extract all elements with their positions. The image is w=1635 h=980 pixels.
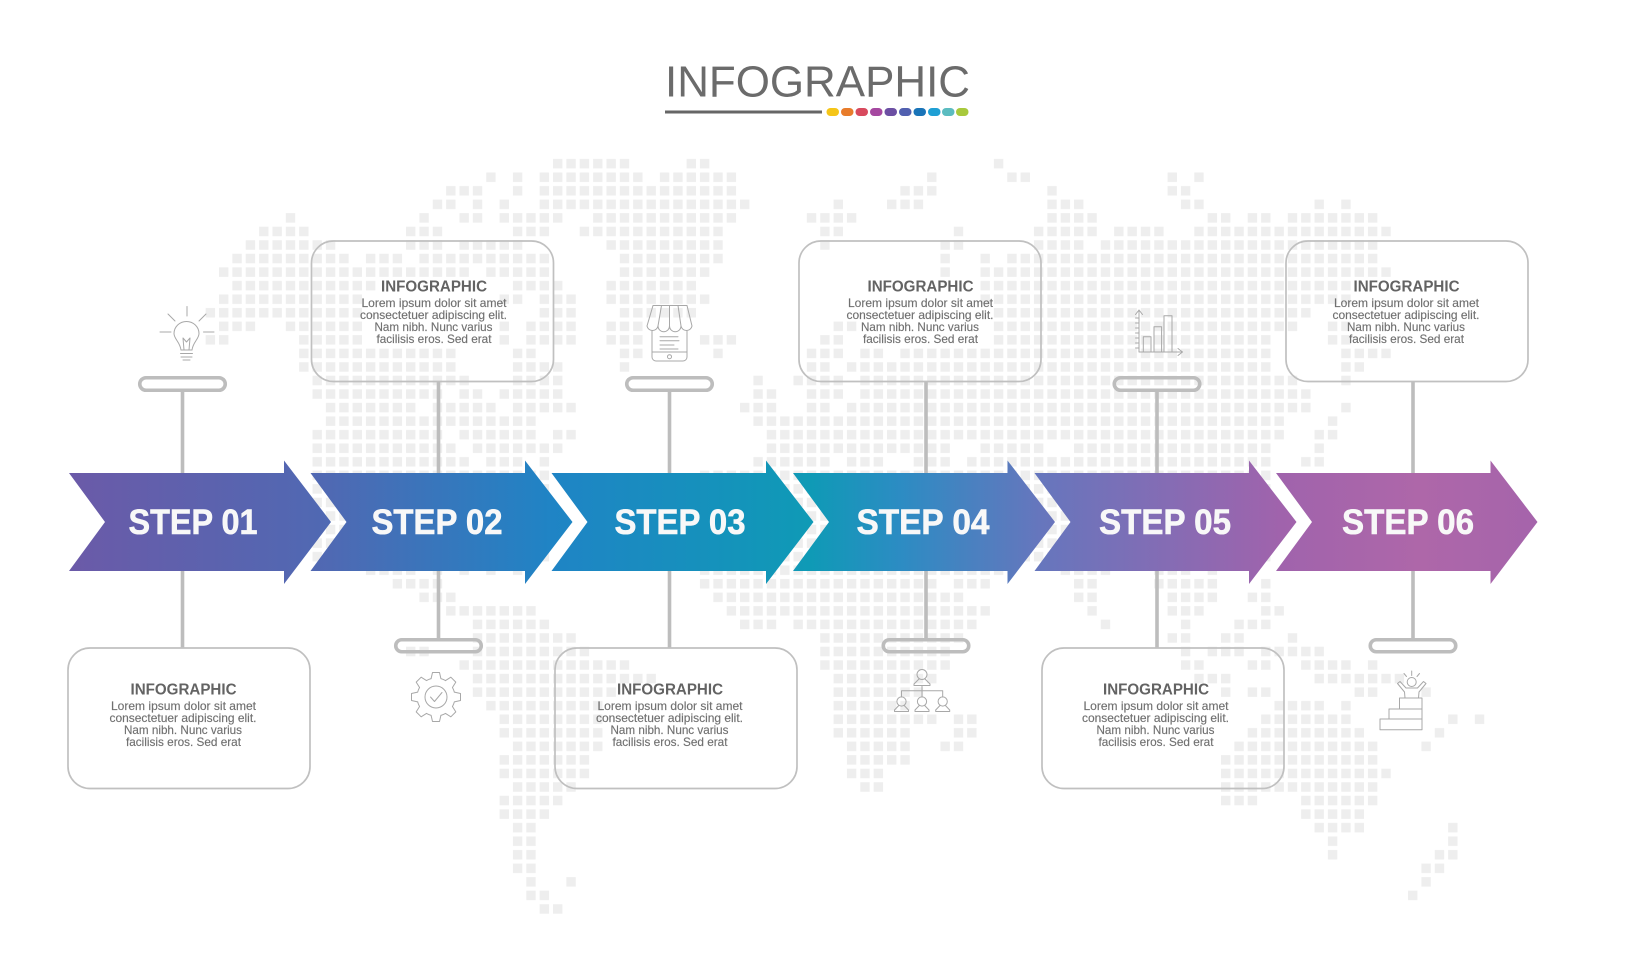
arrow: step 5: STEP 05 [1099,503,1231,542]
panel: step 4 text box [799,241,1041,382]
panel: step 3 text box: consectetuer adipiscing elit. [596,711,743,725]
panel: step 6 text box: Lorem ipsum dolor sit amet [1334,296,1480,310]
arrow: step 3: STEP 03 [614,503,746,542]
panel: step 4 text box: INFOGRAPHIC [868,278,974,296]
panel: step 4 text box: Nam nibh. Nunc varius [861,320,979,334]
arrow: step 6: STEP 06 [1342,503,1474,542]
panel: step 1 text box: Lorem ipsum dolor sit amet [111,699,257,713]
panel: step 1 text box: INFOGRAPHIC [130,682,237,698]
arrow: step 1 [69,460,331,584]
connector: step 1 [140,378,225,648]
panel: step 3 text box: INFOGRAPHIC [617,682,723,698]
panel: step 4 text box: facilisis eros. Sed erat [863,332,979,346]
panel: step 4 text box: Lorem ipsum dolor sit amet [848,296,994,310]
panel: step 1 text box [68,648,310,788]
title underline with colored dots [665,108,968,116]
title: INFOGRAPHIC [665,58,970,106]
arrow: step 4 [793,460,1055,584]
icon: person on stairs [1380,671,1426,730]
arrow: step 3 [552,460,814,584]
icon: shop on phone [647,306,692,361]
panel: step 3 text box: Nam nibh. Nunc varius [610,723,728,737]
panel: step 2 text box: Nam nibh. Nunc varius [374,320,492,334]
panel: step 5 text box [1042,648,1284,788]
panel: step 1 text box: Nam nibh. Nunc varius [124,723,242,737]
panel: step 2 text box: facilisis eros. Sed erat [376,332,492,346]
connector: step 6 [1370,382,1456,652]
panel: step 5 text box: Lorem ipsum dolor sit amet [1084,699,1229,713]
arrow: step 6 [1276,460,1538,584]
icon: people hierarchy [894,670,950,712]
panel: step 6 text box: facilisis eros. Sed erat [1349,332,1465,346]
icon: gear with check [412,672,460,722]
connector: step 3 [627,378,712,648]
panel: step 5 text box: consectetuer adipiscing elit. [1082,711,1229,725]
connector: step 4 [883,382,969,652]
panel: step 2 text box: Lorem ipsum dolor sit amet [362,296,507,310]
background: dotted world map [204,157,1486,916]
panel: step 1 text box: facilisis eros. Sed erat [126,735,242,749]
panel: step 6 text box: consectetuer adipiscing elit. [1332,308,1480,322]
icon: bar chart [1136,310,1182,356]
panel: step 2 text box: INFOGRAPHIC [381,278,487,296]
panel: step 5 text box: facilisis eros. Sed erat [1098,735,1214,749]
arrow: step 2 [310,460,572,584]
arrow: step 1: STEP 01 [128,503,258,542]
panel: step 3 text box: facilisis eros. Sed erat [612,735,728,749]
connector: step 2 [396,382,481,652]
panel: step 3 text box: Lorem ipsum dolor sit amet [598,699,743,713]
panel: step 5 text box: INFOGRAPHIC [1103,682,1209,698]
connector: step 5 [1114,378,1200,648]
panel: step 2 text box: consectetuer adipiscing elit. [360,308,507,322]
arrow: step 4: STEP 04 [856,503,990,542]
arrow: step 5 [1034,460,1296,584]
panel: step 4 text box: consectetuer adipiscing elit. [846,308,994,322]
panel: step 6 text box: Nam nibh. Nunc varius [1347,320,1465,334]
panel: step 6 text box [1286,241,1528,382]
panel: step 6 text box: INFOGRAPHIC [1354,278,1460,296]
panel: step 3 text box [555,648,797,788]
panel: step 1 text box: consectetuer adipiscing elit. [110,711,256,725]
panel: step 2 text box [312,241,554,382]
icon: light bulb [160,306,214,360]
arrow: step 2: STEP 02 [372,503,502,542]
panel: step 5 text box: Nam nibh. Nunc varius [1096,723,1214,737]
